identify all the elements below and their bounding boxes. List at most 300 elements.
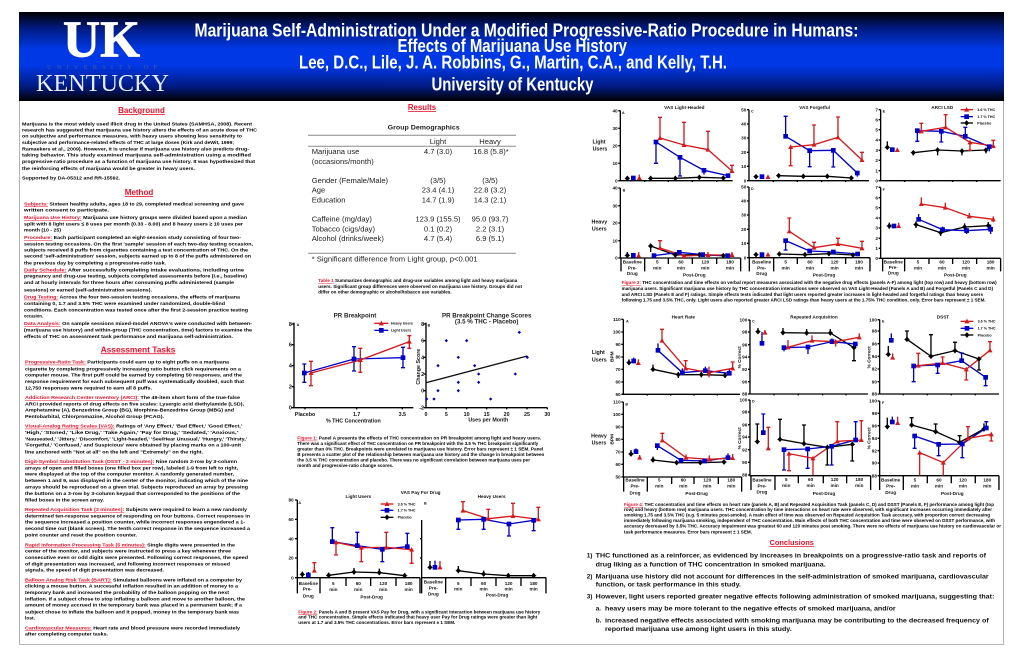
- text block: assessment tasks: arrays should be reproduced on a given trial. Subjects reproduced an array by pressing: [25, 484, 248, 490]
- chart: panel B scatter plot: 15: [484, 412, 490, 418]
- chart: panel F DSST, heavy users: Baseline: [881, 477, 901, 482]
- chart: panel E ARCI LSD, light users: 3: [875, 148, 878, 153]
- text block: assessment tasks: lost.: [25, 616, 36, 622]
- chart: panel A THC concentration: 1.7: [353, 412, 360, 418]
- heading: Background: Background: [118, 106, 165, 115]
- chart: panel D repeated acquisition, heavy users: D: [752, 400, 755, 404]
- chart: panel F ARCI LSD, heavy users: min: [938, 266, 946, 271]
- chart: panel B heavy users: Drug: [428, 592, 439, 597]
- chart: panel B VAS light-headed, heavy users: min: [677, 266, 685, 271]
- chart: panel C repeated acquisition, light users: 90: [742, 379, 748, 384]
- chart: panel A THC concentration: 4: [289, 364, 292, 370]
- chart: panel B heart rate, heavy users: min: [703, 483, 712, 488]
- chart: panel A THC concentration: 2: [289, 385, 292, 391]
- chart: panel B heavy users: min: [480, 587, 488, 592]
- legend: Placebo: [977, 121, 992, 125]
- table: group demographics: Alcohol (drinks/week): [312, 234, 384, 243]
- caption: figure 4: immediately following marijuana smoking, independent of THC concentration. Main effects of both THC concentration and time were observed on DSST performance, with: [624, 518, 995, 523]
- legend: Heavy Users: [391, 322, 413, 326]
- chart: panel B scatter plot: Change Score: [416, 349, 422, 385]
- chart: panel A light users: min: [329, 587, 338, 592]
- chart: panel C repeated acquisition, light users: C: [752, 320, 755, 324]
- table: group demographics: Light: [430, 137, 447, 146]
- text block: background: on subjective and performance measures, with heavy users showing less sensitivity to: [22, 134, 242, 140]
- chart: panel F ARCI LSD, heavy users: 0: [875, 256, 878, 261]
- legend: 3.6 % THC: [977, 108, 996, 112]
- caption: figure 3: Figure 3: THC concentration and time effects on verbal report measures associated with the negative drug effects (panels A-F) among light (top row) and heavy (bottom row): [622, 280, 997, 285]
- text block: method: and at hourly intervals for three hours after consuming puffs administered (sample: [24, 280, 234, 286]
- caption: figure 3: [622, 280, 997, 302]
- heading: Conclusions: Conclusions: [770, 538, 814, 547]
- chart: panel A heart rate, light users: 80: [615, 355, 621, 360]
- chart: panel B heart rate, heavy users: BPM: [610, 434, 615, 444]
- chart: panel E DSST, light users: % Correct: [867, 346, 872, 368]
- chart: panel D VAS forgetful, heavy users: 20: [741, 227, 747, 232]
- chart: panel D repeated acquisition, heavy users: 88: [742, 473, 748, 478]
- chart: panel C VAS forgetful, light users: 50: [741, 107, 747, 112]
- chart: panel B VAS light-headed, heavy users: 120: [701, 260, 710, 265]
- text block: method: session testing occasions. On the first 'sample' session of each two-day testing occasion,: [24, 241, 254, 247]
- chart: panel F DSST, heavy users: 92: [872, 448, 877, 453]
- text block: assessment tasks: Pentobarbital, Chlorpromazine, Alcohol Group (PCAG).: [25, 414, 165, 420]
- chart: panel F DSST, heavy users: 100: [869, 399, 877, 404]
- chart: panel B scatter plot: 8: [421, 322, 424, 328]
- chart: panel B VAS light-headed, heavy users: 20: [612, 221, 618, 226]
- caption: figure 3: marijuana users. Significant marijuana use history by THC concentration interactions were observed on VAS Light-Headed (Panels A and B) and Forgetful (Panels C and D): [622, 286, 994, 291]
- caption: figure 4: row) and heavy (bottom row) marijuana users. THC concentration by time interactions on heart rate were observed, with significant increases occurring immediately after: [624, 507, 992, 512]
- table: group demographics: 95.0 (93.7): [472, 215, 509, 224]
- chart: panel E DSST, light users: E: [882, 320, 885, 324]
- chart: panel B heart rate, heavy users: 90: [615, 425, 621, 430]
- table: group demographics: Heavy: [479, 137, 501, 146]
- chart: panel B VAS light-headed, heavy users: min: [701, 266, 710, 271]
- text block: method: second 'self-administration' session, subjects earned up to 8 of the puffs administered on: [24, 254, 251, 260]
- chart: panel A light users: 60: [356, 581, 361, 586]
- figure 3: verbal report charts: [591, 105, 1001, 277]
- text block: method: conditions. Each concentration was tested once after the first 2-session practice testing: [24, 308, 248, 314]
- chart: panel B heart rate, heavy users: 70: [615, 450, 621, 455]
- caption: figure 4: Figure 4: THC concentration and time effects on heart rate (panels A, B) and Repeated Acquisition Task (panels C, D) and DSST (Panels E, F) performance among light (top: [624, 502, 994, 507]
- chart: panel D VAS forgetful, heavy users: min: [782, 266, 790, 271]
- caption: figure 1: month and progressive-ratio change scores.: [297, 463, 393, 468]
- chart: panel E ARCI LSD, light users: 5: [875, 127, 878, 132]
- text block: assessment tasks: after completing computer tasks.: [25, 632, 109, 638]
- text block: assessment tasks: Digit-Symbol Substitution Task (DSST - 2 minutes): Nine random 3-row by 3-column: [25, 459, 237, 465]
- text block: assessment tasks: consecutive even or odd digits were presented. Following correct responses, the speed: [25, 555, 248, 561]
- chart: panel E DSST, light users: 96: [872, 341, 877, 346]
- text block: method: Marijuana Use History: Marijuana use history groups were divided based upon a median: [24, 215, 247, 221]
- legend: 1.7 % THC: [978, 327, 996, 331]
- chart: panel D VAS forgetful, heavy users: 50: [741, 185, 747, 190]
- chart: panel F ARCI LSD, heavy users: Baseline: [884, 260, 903, 265]
- chart: panel B heart rate, heavy users: B: [625, 402, 628, 406]
- chart: panel D repeated acquisition, heavy users: 96: [742, 422, 748, 427]
- row label: light users: [592, 350, 607, 364]
- chart: panel F DSST, heavy users: 180: [983, 477, 992, 482]
- chart: panel D VAS forgetful, heavy users: min: [855, 266, 863, 271]
- heading: Method: Method: [125, 188, 153, 197]
- chart: panel D VAS forgetful, heavy users: 40: [741, 199, 747, 204]
- row label: heavy users: Heavy: [591, 220, 607, 226]
- text block: assessment tasks: cigarette by completing progressively increasing ratio button click requirements on a: [25, 366, 241, 372]
- row label: light users: Light: [592, 350, 605, 356]
- chart: panel B VAS light-headed, heavy users: 60: [678, 260, 684, 265]
- chart: panel F DSST, heavy users: 60: [936, 477, 942, 482]
- chart: panel B scatter plot: Uses per Month: [468, 418, 508, 424]
- chart: panel B heart rate, heavy users: 100: [613, 412, 621, 417]
- chart: panel F ARCI LSD, heavy users: 180: [987, 260, 995, 265]
- chart: panel E ARCI LSD, light users: 7: [875, 107, 878, 112]
- text block: method: effects of THC on assessment task performance and marijuana self-administration.: [24, 334, 234, 340]
- row label: heavy users: [591, 433, 607, 447]
- chart: panel A THC concentration: [289, 321, 413, 425]
- chart: panel A light users: 180: [405, 581, 413, 586]
- chart: panel E DSST, light users: [867, 314, 999, 397]
- text block: conclusions: [587, 553, 994, 633]
- chart: panel C VAS forgetful, light users: 20: [741, 150, 747, 155]
- chart: panel B heart rate, heavy users: 50: [615, 475, 621, 480]
- chart: panel F DSST, heavy users: 98: [872, 411, 877, 416]
- text block: assessment tasks: Visual-Analog Rating Scales (VAS): Ratings of 'Any Effect,' 'Bad Effect,' 'Good Effect,': [25, 424, 242, 430]
- table: group demographics: (3/5): [482, 176, 498, 185]
- chart: panel F DSST, heavy users: [867, 399, 999, 496]
- caption: figure 1: B presents a scatter plot of the relationship between marijuana use history and the change in breakpoint between: [297, 452, 545, 457]
- chart: panel B scatter plot: 0: [425, 412, 428, 418]
- text block: assessment tasks: Progressive-Ratio Task: Participants could earn up to eight puffs on a marijuana: [25, 360, 229, 366]
- chart: panel B VAS light-headed, heavy users: [612, 186, 741, 277]
- table: group demographics: [308, 124, 516, 263]
- chart: panel D VAS forgetful, heavy users: 10: [741, 241, 747, 246]
- University of Kentucky logo: [36, 12, 169, 97]
- chart: panel C repeated acquisition, light users: Repeated Acquisition: [790, 314, 838, 319]
- chart: panel E ARCI LSD, light users: 6: [875, 117, 878, 122]
- chart: panel C repeated acquisition, light users: [737, 314, 868, 397]
- chart: panel B heart rate, heavy users: Pre-: [630, 483, 640, 488]
- chart: panel B scatter plot: 2: [421, 372, 424, 378]
- chart: panel A heart rate, light users: [610, 314, 740, 397]
- chart: panel B VAS light-headed, heavy users: 0: [615, 256, 618, 261]
- chart: panel A heart rate, light users: BPM: [610, 351, 615, 362]
- table: group demographics: (occasions/month): [312, 157, 374, 166]
- chart: panel C repeated acquisition, light users: 88: [742, 392, 748, 397]
- legend: Placebo: [398, 516, 412, 520]
- chart: panel B VAS light-headed, heavy users: Pre-: [628, 265, 637, 270]
- row label: heavy users: Heavy: [591, 433, 607, 439]
- chart: panel B scatter plot: 10: [464, 412, 470, 418]
- text block: method: split with 8 light users ≤ 8 uses per month (0.33 - 8.00) and 8 heavy users ≥ 10 uses per: [24, 221, 243, 227]
- chart: panel D repeated acquisition, heavy users: min: [830, 483, 839, 488]
- text block: conclusions: However, light users reported greater negative effects following administration of smoked marijuana, suggesting that:: [596, 594, 994, 601]
- text block: method: sessions) or earned (self-administration sessions).: [24, 288, 153, 294]
- text block: assessment tasks: determined ten-response sequence of responding on four buttons. Correct responses in: [25, 513, 250, 519]
- chart: panel A VAS light-headed, light users: 30: [612, 126, 618, 131]
- chart: panel D repeated acquisition, heavy users: % Correct: [737, 427, 742, 449]
- text block: assessment tasks: Amphetamine (A), Benzedrine Group (BG), Morphine-Benzedrine Group (MBG) and: [25, 408, 234, 414]
- caption: table 1: Table 1 Summarizes demographic and drug-use variables among light and heavy marijuana: [318, 278, 518, 283]
- text block: assessment tasks: the sequence increased a position counter, while incorrect responses engendered a 1-: [25, 520, 245, 526]
- chart: panel B heart rate, heavy users: 60: [681, 477, 686, 482]
- text block: assessment tasks: [24, 360, 250, 638]
- chart: panel B heavy users: 120: [505, 581, 513, 586]
- chart: panel E DSST, light users: 92: [872, 367, 877, 372]
- chart: panel B VAS light-headed, heavy users: Drug: [627, 271, 638, 276]
- chart: panel A light users: 80: [288, 498, 294, 503]
- chart: panel B heavy users: Baseline: [424, 579, 443, 584]
- legend: [381, 501, 416, 520]
- chart: panel F ARCI LSD, heavy users: Drug: [888, 271, 899, 276]
- text block: method: the previous day by completing a progressive-ratio task.: [24, 260, 167, 266]
- heading: Results: Results: [408, 103, 437, 112]
- chart: panel F ARCI LSD, heavy users: [875, 185, 1001, 277]
- text block: assessment tasks: Cardiovascular Measures: Heart rate and blood pressure were recorded immediately: [25, 625, 240, 631]
- chart: panel B scatter plot: 5: [445, 412, 448, 418]
- table: group demographics: 22.8 (3.2): [474, 186, 507, 195]
- chart: panel B heavy users: 5: [457, 581, 460, 586]
- chart: panel C VAS forgetful, light users: C: [751, 110, 754, 114]
- chart: panel B heart rate, heavy users: [610, 400, 742, 496]
- chart: panel F ARCI LSD, heavy users: 120: [962, 260, 970, 265]
- text block: method: subjects received 8 puffs from cigarettes containing a test concentration of THC. On the: [24, 247, 248, 253]
- row label: light users: Users: [593, 147, 607, 153]
- chart: panel B VAS light-headed, heavy users: Baseline: [623, 260, 642, 265]
- text block: assessment tasks: were displayed at the top of the computer monitor. A randomly generated number,: [24, 472, 235, 478]
- chart: panel A heart rate, light users: A: [626, 320, 629, 324]
- chart: panel F ARCI LSD, heavy users: 1: [875, 246, 878, 251]
- table: group demographics: Group Demographics: [388, 124, 460, 131]
- chart: panel A THC concentration: % THC Concentration: [326, 419, 381, 425]
- table: group demographics: 4.7 (3.0): [424, 147, 453, 156]
- chart: panel F DSST, heavy users: min: [959, 483, 967, 488]
- text block: method: Subjects: Sixteen healthy adults, ages 18 to 29, completed medical screening and gave: [24, 202, 244, 208]
- chart: panel C VAS forgetful, light users: 10: [741, 164, 747, 169]
- chart: panel F DSST, heavy users: % Correct: [867, 427, 872, 449]
- legend: 3.6 % THC: [398, 502, 416, 506]
- chart: panel D repeated acquisition, heavy users: min: [855, 483, 864, 488]
- chart: panel F ARCI LSD, heavy users: 5: [917, 260, 920, 265]
- chart: panel A THC concentration: 6: [289, 343, 292, 349]
- University of Kentucky logo: UK: [63, 12, 141, 68]
- text block: assessment tasks: second time out (blank screen). The tenth correct response in the sequence increased a: [25, 526, 250, 532]
- chart: panel A VAS light-headed, light users: [612, 105, 734, 183]
- table: group demographics: 14.3 (2.1): [474, 195, 507, 204]
- figure 2: VAS Pay For Drug charts: VAS Pay For Drug: [401, 490, 441, 495]
- text block: assessment tasks: amount of money accrued in the temporary bank was placed in a permanent bank; if a: [25, 603, 242, 609]
- chart: panel D repeated acquisition, heavy users: 98: [742, 410, 748, 415]
- chart: panel B heavy users: min: [530, 587, 538, 592]
- chart: panel B VAS light-headed, heavy users: 5: [656, 260, 659, 265]
- chart: panel A heart rate, light users: Heart Rate: [672, 314, 695, 319]
- chart: panel B heavy users: 60: [481, 581, 487, 586]
- chart: panel A heart rate, light users: 70: [615, 367, 621, 372]
- chart: panel D VAS forgetful, heavy users: 60: [807, 260, 813, 265]
- chart: panel D repeated acquisition, heavy users: min: [806, 483, 815, 488]
- caption: figure 1: the 3.5 % THC concentration and placebo. There was no significant correlation between marijuana uses per: [297, 458, 530, 463]
- chart: panel A light users: 20: [288, 556, 294, 561]
- chart: panel A light users: [288, 494, 420, 599]
- table: group demographics: 4.7 (5.4): [424, 234, 453, 243]
- heading: Assessment Tasks: Assessment Tasks: [101, 344, 176, 354]
- chart: panel F ARCI LSD, heavy users: 60: [939, 260, 945, 265]
- title: Effects of Marijuana Use History: [398, 36, 627, 56]
- row label: light users: Users: [592, 358, 607, 364]
- chart: panel B scatter plot: 30: [544, 412, 550, 418]
- text block: assessment tasks: 12,750 responses were required to earn all 8 puffs.: [25, 385, 153, 391]
- text block: assessment tasks: line anchored with "Not at all" on the left and "Extremely" on the right.: [25, 449, 204, 455]
- chart: panel C VAS forgetful, light users: 30: [741, 136, 747, 141]
- chart: panel B heavy users: Pre-: [429, 585, 438, 590]
- chart: panel F DSST, heavy users: 120: [959, 477, 967, 482]
- chart: panel F ARCI LSD, heavy users: 2: [875, 236, 878, 241]
- row label: heavy users: Users: [592, 441, 606, 447]
- text block: assessment tasks: subject chose to inflate the balloon and it popped, money in the temporary bank was: [25, 609, 239, 615]
- chart: panel B heavy users: B: [424, 502, 427, 506]
- text block: assessment tasks: arrays of open and filled boxes (one filled box per row), labeled 1-9 from left to right,: [25, 465, 239, 471]
- caption: figure 4: smoking 1.75 and 3.5% THC (e.g. 5 minutes post-smoke). A main effect of time was observed on Repeated Acquisition Task accuracy, with proportion correct decreasing: [624, 513, 990, 518]
- chart: panel A light users: 5: [332, 581, 335, 586]
- chart: panel A light users: A: [298, 501, 301, 505]
- chart: panel A light users: Light Users: [346, 494, 372, 499]
- chart: panel B heavy users: min: [505, 587, 513, 592]
- chart: panel F DSST, heavy users: 88: [872, 473, 877, 478]
- chart: panel B heart rate, heavy users: 180: [727, 477, 736, 482]
- text block: background: Ramaekers et al., 2009). However, it is unclear if marijuana use history also predicts drug-: [22, 146, 249, 152]
- chart: panel B VAS light-headed, heavy users: min: [653, 266, 662, 271]
- table: group demographics: Caffeine (mg/day): [312, 215, 372, 224]
- chart: panel B heart rate, heavy users: Drug: [630, 490, 641, 495]
- chart: panel B heavy users: Heavy Users: [478, 494, 506, 499]
- chart: panel E ARCI LSD, light users: 1: [875, 168, 878, 173]
- text block: method: occasion.: [24, 314, 44, 320]
- chart: panel A light users: 120: [379, 581, 388, 586]
- chart: panel A heart rate, light users: 100: [613, 330, 621, 335]
- chart: panel B heart rate, heavy users: min: [679, 483, 688, 488]
- row label: light users: [592, 139, 607, 153]
- title: University of Kentucky: [432, 75, 594, 95]
- figure 4: physiological and performance charts: [591, 314, 999, 496]
- caption: figure 1: There was a significant effect of THC concentration on PR breakpoint with the 3.5 % THC breakpoint significantly: [297, 441, 539, 446]
- text block: conclusions: THC functioned as a reinforcer, as evidenced by increases in breakpoints on a progressive-ratio task and reports of: [596, 553, 987, 560]
- text block: assessment tasks: filled boxes in the screen array.: [25, 497, 105, 503]
- chart: panel F ARCI LSD, heavy users: F: [883, 188, 886, 192]
- legend: Light Users: [391, 329, 411, 333]
- chart: panel D repeated acquisition, heavy users: min: [782, 483, 791, 488]
- chart: panel D VAS forgetful, heavy users: 30: [741, 213, 747, 218]
- table: group demographics: 23.4 (4.1): [422, 186, 455, 195]
- chart: panel C repeated acquisition, light users: 94: [742, 355, 748, 360]
- chart: panel A VAS light-headed, light users: 0: [615, 178, 618, 183]
- chart: panel A THC concentration: 3.5: [399, 412, 406, 418]
- chart: panel E ARCI LSD, light users: E: [883, 110, 886, 114]
- legend: [374, 321, 413, 333]
- chart: panel B scatter plot: [416, 322, 550, 424]
- chart: panel F ARCI LSD, heavy users: 5: [875, 205, 878, 210]
- chart: panel D VAS forgetful, heavy users: D: [751, 187, 754, 191]
- chart: panel F ARCI LSD, heavy users: 4: [875, 216, 878, 221]
- chart: panel D repeated acquisition, heavy users: 180: [855, 477, 864, 482]
- text block: assessment tasks: Addiction Research Center Inventory (ARCI): The 49-item short form of the true-false: [25, 395, 240, 401]
- chart titles: figure 1: PR Breakpoint Change Scores: [442, 312, 532, 319]
- text block: conclusions: reported marijuana use among light users in this study.: [605, 626, 792, 633]
- chart: panel B VAS light-headed, heavy users: min: [726, 266, 734, 271]
- text block: method: Procedure: Each participant completed an eight-session study consisting of four two-: [24, 235, 241, 241]
- caption: figure 4: task performance measures. Error bars represent ± 1 SEM.: [624, 529, 752, 534]
- chart: panel D repeated acquisition, heavy users: Baseline: [752, 477, 772, 482]
- table: group demographics: Gender (Female/Male): [312, 176, 389, 185]
- chart: panel A light users: Post-Drug: [360, 594, 383, 599]
- chart: panel D VAS forgetful, heavy users: [741, 185, 870, 277]
- chart: panel C repeated acquisition, light users: % Correct: [737, 346, 742, 368]
- chart: panel A heart rate, light users: 50: [615, 392, 621, 397]
- text block: method: pregnancy and drug-use testing, subjects completed assessments before (i.e., baseline): [24, 274, 247, 280]
- text block: assessment tasks: 'Forgetful,' 'Confused,' and Suspicious' were obtained by placing marks on a 100-unit: [25, 443, 241, 449]
- table: group demographics: 0.1 (0.2): [424, 224, 453, 233]
- chart: panel D repeated acquisition, heavy users: Post-Drug: [813, 491, 835, 496]
- table: group demographics: Age: [312, 186, 325, 195]
- chart: panel A light users: 60: [288, 517, 294, 522]
- chart: panel C repeated acquisition, light users: 100: [740, 318, 748, 323]
- chart: panel B VAS light-headed, heavy users: Post-Drug: [683, 272, 706, 277]
- legend: [961, 319, 996, 337]
- chart: panel D VAS forgetful, heavy users: min: [806, 266, 814, 271]
- text block: conclusions: function, or task performance in this study.: [596, 582, 741, 589]
- chart: panel F DSST, heavy users: Post-Drug: [941, 491, 964, 496]
- text block: conclusions: a.: [596, 606, 601, 613]
- title: [194, 21, 858, 95]
- chart: panel B heavy users: [420, 494, 546, 598]
- text block: conclusions: Marijuana use history did not account for differences in the self-administration of smoked marijuana, cardiovascular: [596, 573, 989, 580]
- chart titles: figure 1: (3.5 % THC - Placebo): [455, 318, 519, 326]
- chart: panel A light users: Baseline: [299, 581, 318, 586]
- chart: panel A THC concentration: Placebo: [295, 412, 316, 418]
- chart: panel E DSST, light users: 100: [869, 317, 877, 322]
- chart: panel D repeated acquisition, heavy users: 100: [740, 398, 748, 403]
- text block: assessment tasks: temporary bank and increased the probability of the balloon popping on the next: [25, 590, 229, 596]
- text block: conclusions: increased negative effects associated with smoking marijuana may be contributing to the decreased frequency of: [605, 617, 990, 624]
- text block: background: the reinforcing effects of marijuana would be greater in heavy users.: [22, 166, 196, 172]
- text block: method: Daily Schedule: After successfully completing intake evaluations, including urine: [24, 267, 244, 273]
- chart: panel B heart rate, heavy users: 60: [615, 462, 621, 467]
- chart: panel B scatter plot: 25: [524, 412, 530, 418]
- row label: heavy users: [591, 220, 607, 233]
- chart: panel B heart rate, heavy users: min: [655, 483, 664, 488]
- chart: panel B heart rate, heavy users: min: [727, 483, 736, 488]
- chart: panel C VAS forgetful, light users: [741, 105, 869, 183]
- chart: panel E ARCI LSD, light users: 4: [875, 138, 878, 143]
- caption: figure 2: [298, 609, 541, 625]
- chart: panel B scatter plot: 20: [504, 412, 510, 418]
- chart: panel A light users: Pre-: [303, 587, 312, 592]
- chart: panel B scatter plot: 6: [421, 339, 424, 345]
- text block: method: [23, 202, 254, 340]
- chart: panel A VAS light-headed, light users: 10: [612, 161, 618, 166]
- chart: panel A VAS light-headed, light users: A: [622, 111, 625, 115]
- text block: conclusions: 3): [587, 594, 592, 601]
- chart: panel E DSST, light users: 94: [872, 354, 877, 359]
- chart: panel D repeated acquisition, heavy users: 90: [742, 460, 748, 465]
- chart: panel A light users: min: [354, 587, 363, 592]
- text block: assessment tasks: of digit presentation was increased, and following incorrect responses or missed: [25, 561, 230, 567]
- text block: conclusions: drug liking as a function of THC concentration in smoked marijuana.: [596, 561, 826, 568]
- chart: panel F ARCI LSD, heavy users: 6: [875, 195, 878, 200]
- chart: panel C repeated acquisition, light users: 92: [742, 367, 748, 372]
- table: group demographics: * Significant difference from Light group, p<0.001: [312, 254, 478, 263]
- chart titles: figure 1: [334, 312, 532, 326]
- chart: panel C VAS forgetful, light users: 0: [744, 178, 747, 183]
- legend: 3.6 % THC: [978, 320, 996, 324]
- text block: conclusions: 2): [587, 573, 592, 580]
- text block: assessment tasks: 'Nauseated,' 'Jittery,' 'Discomfort,' 'Light-headed,' 'See/Hear Unusual,' 'Hungry,' 'Thirsty,': [25, 436, 247, 442]
- chart: panel B heavy users: min: [454, 587, 463, 592]
